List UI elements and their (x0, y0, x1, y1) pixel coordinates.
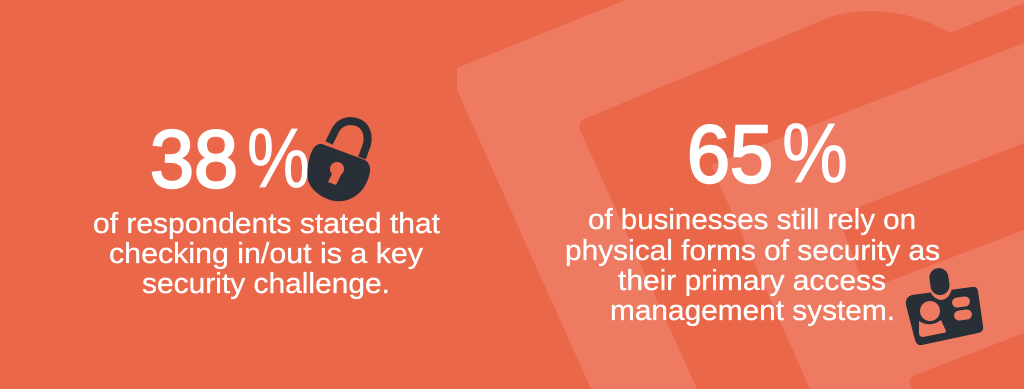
description text: physical forms of security as (565, 235, 940, 267)
description text: their primary access (618, 265, 886, 297)
big number: 38% (150, 111, 310, 205)
icon: ID badge (906, 264, 983, 345)
stat panel: 65 percent (565, 106, 983, 345)
stat panel: 38 percent (93, 111, 440, 300)
big number: 65%: % (782, 106, 848, 200)
description text (565, 204, 940, 327)
background watermark: outer chevron (457, 0, 1024, 389)
description text: of businesses still rely on (588, 204, 916, 236)
description text: security challenge. (142, 268, 390, 300)
big number: 65%: 65 (687, 109, 773, 200)
description text: of respondents stated that (93, 208, 440, 240)
big number: 38%: % (247, 111, 310, 205)
description text: management system. (610, 295, 895, 327)
icon: padlock (307, 121, 370, 201)
background watermark: inner chevron (711, 43, 1024, 389)
big number: 38%: 38 (150, 114, 238, 205)
description text (93, 208, 440, 300)
big number: 65% (687, 106, 848, 200)
description text: checking in/out is a key (109, 238, 424, 270)
